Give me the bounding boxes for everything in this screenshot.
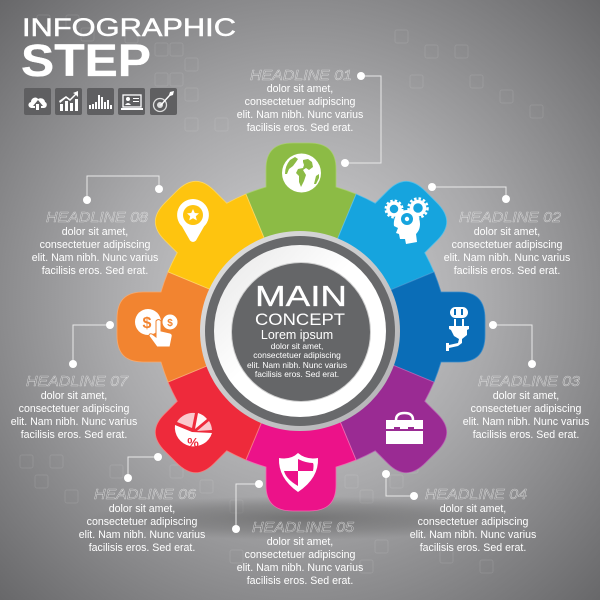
- icon: presentation laptop: [118, 88, 145, 115]
- text block: headline 08: consectetuer adipiscing: [40, 239, 150, 251]
- text block: headline 05: dolor sit amet,: [267, 536, 333, 548]
- text block: headline 05: consectetuer adipiscing: [245, 549, 355, 561]
- text block: headline 07: consectetuer adipiscing: [19, 403, 129, 415]
- connector 04: [382, 470, 418, 500]
- title: STEP: [21, 35, 151, 86]
- text block: headline 03: facilisis eros. Sed erat.: [473, 429, 579, 441]
- icon: plug: [446, 307, 469, 351]
- text block: headline 02: consectetuer adipiscing: [452, 239, 562, 251]
- title: [21, 14, 236, 86]
- connector 03: [489, 321, 536, 368]
- center text: dolor sit amet,: [271, 341, 323, 351]
- text block: headline 07: HEADLINE 07: [26, 373, 129, 390]
- text block: headline 03: HEADLINE 03: [478, 373, 581, 390]
- icon: pie chart: [175, 413, 212, 450]
- text block: headline 03: consectetuer adipiscing: [471, 403, 581, 415]
- text block: headline 06: dolor sit amet,: [109, 503, 175, 515]
- connector 02: [428, 183, 510, 203]
- text block: headline 06: HEADLINE 06: [94, 486, 197, 503]
- text block: headline 02: facilisis eros. Sed erat.: [454, 265, 560, 277]
- text block: headline 06: facilisis eros. Sed erat.: [89, 542, 195, 554]
- text block: headline 03: dolor sit amet,: [493, 390, 559, 402]
- text block: headline 08: facilisis eros. Sed erat.: [42, 265, 148, 277]
- text block: headline 05: [237, 519, 363, 587]
- text block: headline 04: HEADLINE 04: [425, 486, 527, 503]
- icon: head with gears: [386, 198, 428, 244]
- segment: dark blue: [301, 272, 485, 382]
- text block: headline 05: elit. Nam nibh. Nunc varius: [237, 562, 363, 574]
- text block: headline 06: elit. Nam nibh. Nunc varius: [79, 529, 205, 541]
- text block: headline 01: [237, 67, 363, 134]
- toolbar icons: [24, 88, 177, 115]
- text block: headline 01: facilisis eros. Sed erat.: [247, 122, 353, 134]
- text block: headline 04: elit. Nam nibh. Nunc varius: [410, 529, 536, 541]
- text block: headline 05: HEADLINE 05: [252, 519, 355, 536]
- center text: Lorem ipsum: [261, 328, 333, 342]
- center circle: [200, 231, 400, 431]
- text block: headline 01: HEADLINE 01: [250, 67, 352, 84]
- icon: cloud upload: [24, 88, 51, 115]
- icon: hand with dollars: [135, 309, 178, 347]
- text block: headline 03: elit. Nam nibh. Nunc varius: [463, 416, 589, 428]
- segment: magenta: [246, 327, 356, 511]
- text block: headline 07: [11, 373, 137, 441]
- connector 05: [232, 480, 263, 533]
- text block: headline 02: dolor sit amet,: [474, 226, 540, 238]
- icon: target arrow: [150, 88, 177, 115]
- icon: bar histogram: [87, 88, 114, 115]
- text block: headline 08: elit. Nam nibh. Nunc varius: [32, 252, 158, 264]
- icon: location pin star: [177, 199, 209, 242]
- text block: headline 02: [444, 209, 570, 277]
- text block: headline 02: elit. Nam nibh. Nunc varius: [444, 252, 570, 264]
- text block: headline 05: facilisis eros. Sed erat.: [247, 575, 353, 587]
- text block: headline 06: [79, 486, 205, 554]
- connector 01: [341, 72, 381, 167]
- icon: hand with dollars: $: [167, 318, 173, 329]
- center text: consectetuer adipiscing: [253, 350, 341, 360]
- segment: light blue: [262, 158, 470, 366]
- center text: [247, 281, 347, 379]
- text block: headline 04: consectetuer adipiscing: [418, 516, 528, 528]
- text block: headline 01: consectetuer adipiscing: [245, 96, 355, 108]
- text block: headline 07: dolor sit amet,: [41, 390, 107, 402]
- icon: hand with dollars: $: [143, 315, 152, 332]
- text block: headline 01: elit. Nam nibh. Nunc varius: [237, 109, 363, 121]
- text block: headline 08: HEADLINE 08: [46, 209, 149, 226]
- center text: facilisis eros. Sed erat.: [255, 369, 339, 379]
- text block: headline 03: [463, 373, 589, 441]
- text block: headline 07: elit. Nam nibh. Nunc varius: [11, 416, 137, 428]
- icon: pie chart: %: [187, 435, 199, 450]
- text block: headline 08: dolor sit amet,: [62, 226, 128, 238]
- icon: rising chart: [55, 88, 82, 115]
- segment: yellow: [132, 158, 340, 366]
- text block: headline 02: HEADLINE 02: [459, 209, 562, 226]
- connector 06: [124, 453, 162, 482]
- connector 08: [83, 176, 163, 204]
- text block: headline 06: consectetuer adipiscing: [87, 516, 197, 528]
- segment: green: [246, 143, 356, 327]
- connector 07: [69, 321, 114, 368]
- center text: MAIN: [255, 281, 347, 313]
- icon: toolbox: [386, 413, 423, 444]
- text block: headline 04: facilisis eros. Sed erat.: [420, 542, 526, 554]
- text block: headline 07: facilisis eros. Sed erat.: [21, 429, 127, 441]
- gear wheel: [117, 143, 485, 511]
- icon: shield: [279, 453, 318, 492]
- segment: red: [132, 288, 340, 496]
- text block: headline 08: [32, 209, 158, 277]
- text block: headline 04: [410, 486, 536, 554]
- title: INFOGRAPHIC: [22, 14, 236, 42]
- icon: globe: [282, 154, 321, 192]
- segment: orange: [117, 272, 301, 382]
- ground shadow: [90, 496, 510, 540]
- text block: headline 01: dolor sit amet,: [267, 83, 333, 95]
- center text: CONCEPT: [255, 310, 345, 329]
- segment: purple: [262, 288, 470, 496]
- center text: elit. Nam nibh. Nunc varius: [247, 360, 347, 370]
- text block: headline 04: dolor sit amet,: [440, 503, 506, 515]
